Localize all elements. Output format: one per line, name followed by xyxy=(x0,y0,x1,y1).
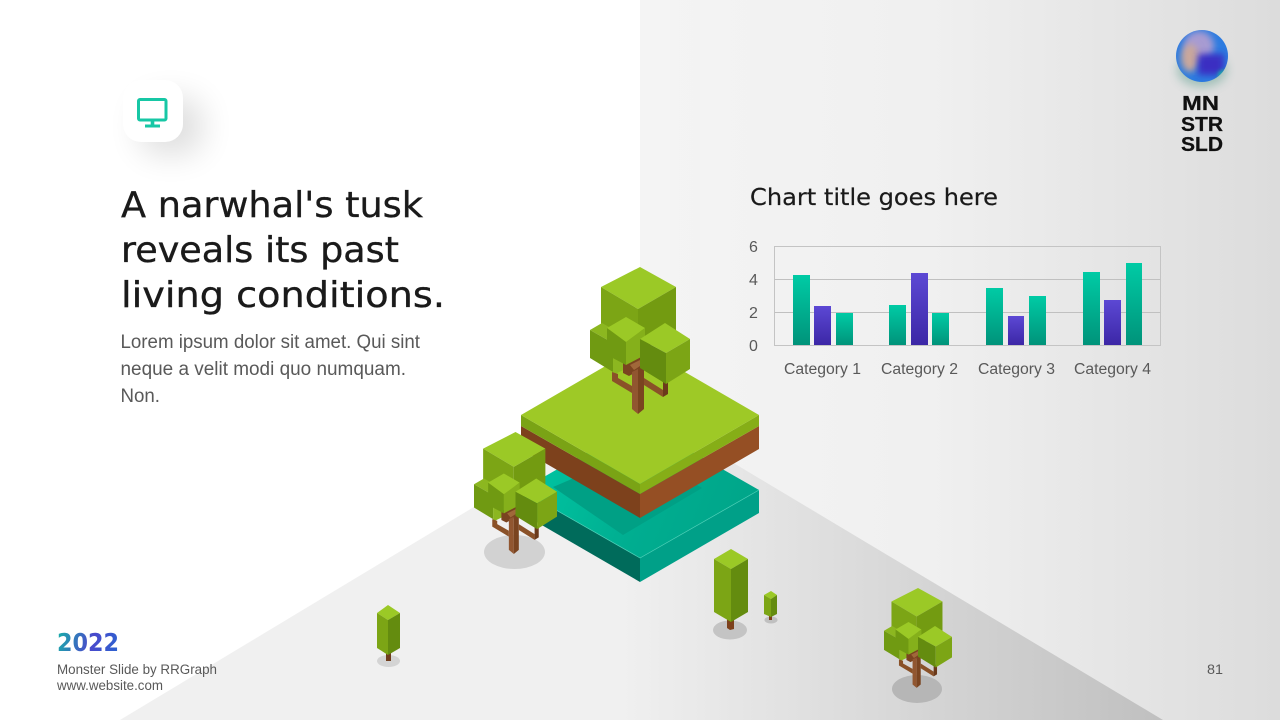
column tree: small xyxy=(764,591,778,624)
bar chart: 0 xyxy=(749,338,758,355)
bar chart: Category 2 xyxy=(881,361,958,378)
column tree: left xyxy=(377,605,400,667)
title: reveals its past xyxy=(121,230,399,271)
body text: Lorem ipsum dolor sit amet. Qui sint xyxy=(120,332,421,353)
bar chart: 4 xyxy=(749,272,758,289)
chart title: Chart title goes here xyxy=(750,185,998,211)
body text xyxy=(120,332,421,407)
footer: credits: www.website.com xyxy=(56,678,163,693)
bar chart: Category 4 xyxy=(1074,361,1151,378)
logo: sphere and wordmark: SLD xyxy=(1181,133,1223,156)
footer: credits xyxy=(56,662,217,693)
isometric floor xyxy=(120,407,1163,720)
bar chart: 2 xyxy=(749,305,758,322)
background panel: right side xyxy=(640,0,1280,720)
body text: neque a velit modi quo numquam. xyxy=(120,359,406,380)
tree with shadow: left xyxy=(474,432,557,569)
page number: 81 xyxy=(1207,661,1223,677)
body text: Non. xyxy=(120,386,160,407)
bar chart: Category 1 xyxy=(784,361,861,378)
bar chart xyxy=(749,239,1160,378)
bar chart: Category 3 xyxy=(978,361,1055,378)
logo: sphere and wordmark: MN xyxy=(1182,92,1219,115)
title xyxy=(121,185,445,316)
logo: sphere and wordmark: STR xyxy=(1181,113,1223,136)
large tree on platform xyxy=(590,267,690,414)
footer: credits: Monster Slide by RRGraph xyxy=(57,662,217,677)
footer: year: 2022 xyxy=(57,628,119,657)
logo: sphere and wordmark xyxy=(1176,30,1228,156)
icon card: monitor xyxy=(123,80,202,154)
soil and grass platform xyxy=(521,346,759,518)
title: living conditions. xyxy=(121,275,445,316)
bar chart: 6 xyxy=(749,239,758,256)
column tree: centre xyxy=(713,549,748,640)
tree with shadow: right xyxy=(884,588,952,703)
water platform xyxy=(521,422,759,582)
title: A narwhal's tusk xyxy=(121,185,423,226)
